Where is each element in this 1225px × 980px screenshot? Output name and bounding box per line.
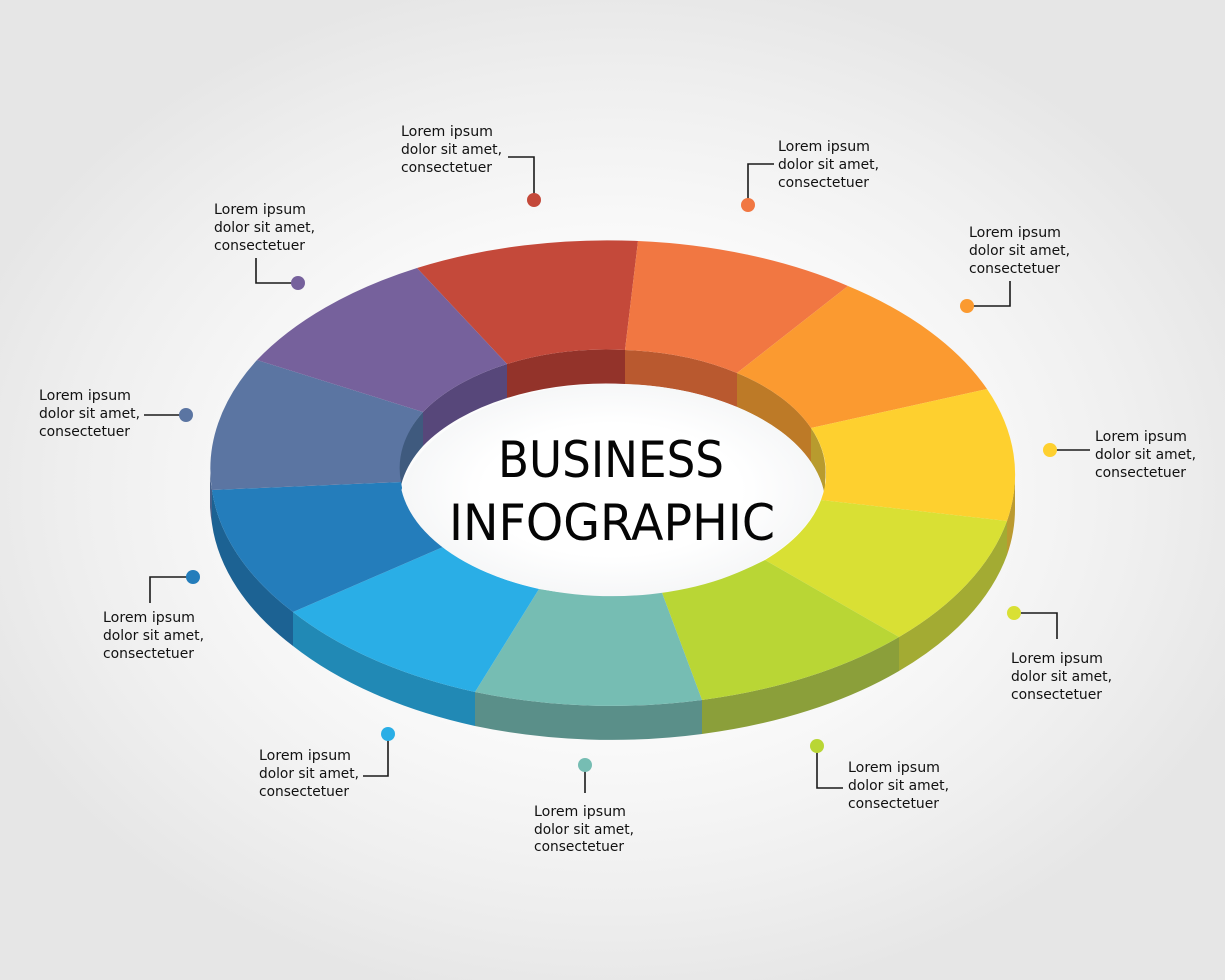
callout: red: consectetuer <box>401 160 492 176</box>
callout: green <box>810 739 949 812</box>
callout: teal: Lorem ipsum <box>534 804 626 820</box>
callout: orange: consectetuer <box>969 261 1060 277</box>
segment: yellow <box>811 389 1015 521</box>
outer side walls <box>210 473 1015 740</box>
callout: blue <box>103 570 204 662</box>
callout: sky blue <box>259 727 395 800</box>
callout: steel blue: dolor sit amet, <box>39 406 140 422</box>
callout: orange red: Lorem ipsum <box>778 139 870 155</box>
segment: red <box>417 240 638 364</box>
callout: red <box>401 124 541 207</box>
callout: teal <box>534 758 634 855</box>
callout: orange red <box>741 139 879 212</box>
callout: steel blue: consectetuer <box>39 424 130 440</box>
callout: orange red: dolor sit amet, <box>778 157 879 173</box>
callout: green: consectetuer <box>848 796 939 812</box>
callout: green: Lorem ipsum <box>848 760 940 776</box>
segment: steel blue <box>210 360 423 490</box>
inner walls <box>399 350 826 516</box>
callout: teal: dolor sit amet, <box>534 822 634 838</box>
segment: lime yellow <box>765 500 1007 637</box>
callout: purple: consectetuer <box>214 238 305 254</box>
callout: lime yellow: consectetuer <box>1011 687 1102 703</box>
segment: orange <box>737 286 987 428</box>
callout: orange <box>960 225 1070 313</box>
title <box>449 431 775 552</box>
callout: steel blue <box>39 388 193 440</box>
segment: purple <box>257 268 507 412</box>
callout: lime yellow <box>1007 606 1112 703</box>
callout: blue: Lorem ipsum <box>103 610 195 626</box>
title: BUSINESS <box>498 431 724 489</box>
callout: purple <box>214 202 315 290</box>
callout: orange red: consectetuer <box>778 175 869 191</box>
callout: blue: consectetuer <box>103 646 194 662</box>
segment: sky blue <box>293 547 539 692</box>
callout: blue: dolor sit amet, <box>103 628 204 644</box>
callout: teal: consectetuer <box>534 839 624 855</box>
callout: orange: Lorem ipsum <box>969 225 1061 241</box>
callout: yellow <box>1043 429 1196 481</box>
centre ellipse <box>402 384 824 596</box>
3D ring chart <box>210 240 1015 740</box>
callout: green: dolor sit amet, <box>848 778 949 794</box>
callout: lime yellow: Lorem ipsum <box>1011 651 1103 667</box>
segment: blue <box>212 482 443 612</box>
callout: yellow: dolor sit amet, <box>1095 447 1196 463</box>
callout: yellow: Lorem ipsum <box>1095 429 1187 445</box>
segment: orange red <box>625 241 848 373</box>
callout: purple: dolor sit amet, <box>214 220 315 236</box>
callout: lime yellow: dolor sit amet, <box>1011 669 1112 685</box>
callout: steel blue: Lorem ipsum <box>39 388 131 404</box>
callout: red: dolor sit amet, <box>401 142 502 158</box>
callout: red: Lorem ipsum <box>401 124 493 140</box>
callout: sky blue: consectetuer <box>259 784 349 800</box>
callout: sky blue: Lorem ipsum <box>259 748 351 764</box>
title: INFOGRAPHIC <box>449 494 775 552</box>
callout: sky blue: dolor sit amet, <box>259 766 359 782</box>
segment: teal <box>475 589 702 706</box>
top face segments <box>210 240 1015 706</box>
callout: yellow: consectetuer <box>1095 465 1186 481</box>
callout: purple: Lorem ipsum <box>214 202 306 218</box>
segment: green <box>661 560 899 700</box>
callout: orange: dolor sit amet, <box>969 243 1070 259</box>
